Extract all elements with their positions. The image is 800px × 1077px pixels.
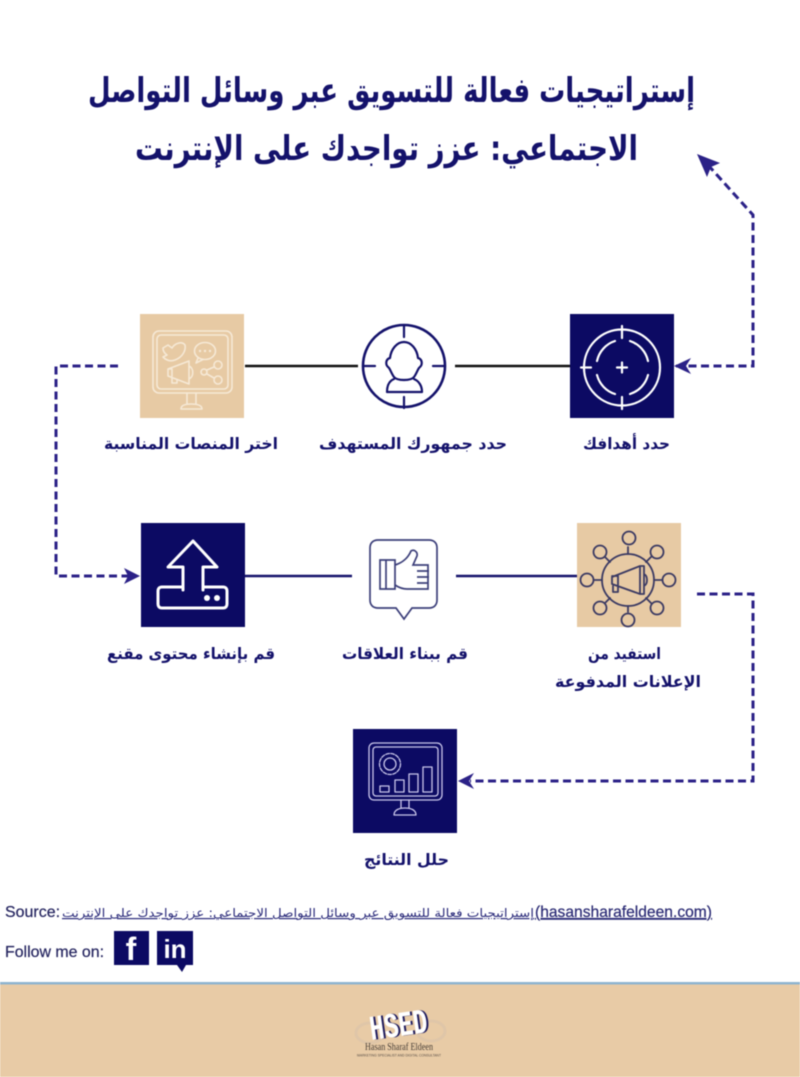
source line: (hasansharafeldeen.com) (535, 904, 712, 921)
step: paid ads (555, 523, 701, 691)
icon: linkedin (157, 931, 193, 972)
label: create content: قم بإنشاء محتوى مقنع (107, 644, 275, 663)
step: create content (107, 523, 275, 663)
logo: HSED (369, 1003, 432, 1051)
label: paid ads (555, 644, 701, 691)
label: set goals: حدد أهدافك (583, 433, 670, 453)
connector: content to relationships (245, 575, 352, 577)
step: choose platforms (104, 314, 278, 453)
icon: analytics monitor (353, 729, 457, 833)
logo (356, 1003, 445, 1058)
source line: Source: (5, 904, 60, 921)
logo: Hasan Sharaf Eldeen (365, 1042, 433, 1053)
logo: HSED (367, 1003, 430, 1051)
icon: upload (141, 523, 245, 627)
icon: facebook: f (126, 931, 137, 967)
connector: relationships to ads (456, 575, 578, 577)
label: build relationships: قم ببناء العلاقات (342, 644, 468, 663)
label: target audience: حدد جمهورك المستهدف (319, 434, 507, 453)
connector: goals to audience (455, 365, 570, 367)
icon: linkedin: in (163, 934, 187, 964)
follow me: Follow me on: (5, 944, 104, 961)
arrow: goals to title (674, 154, 753, 374)
title: الاجتماعي: عزز تواجدك على الإنترنت (135, 129, 638, 169)
step: set goals (570, 314, 674, 453)
title (88, 71, 695, 169)
follow me (5, 931, 193, 972)
icon: megaphone network (577, 523, 681, 627)
icon: target (570, 314, 674, 418)
label: paid ads: الإعلانات المدفوعة (555, 672, 701, 691)
arrow: platforms to content (56, 366, 140, 584)
label: choose platforms: اختر المنصات المناسبة (104, 434, 278, 453)
step: analyze results (353, 729, 457, 869)
step: target audience (319, 325, 507, 453)
label: paid ads: استفيد من (588, 644, 661, 663)
icon: social media monitor (140, 314, 244, 418)
icon: thumbs up speech bubble (370, 540, 437, 619)
source line: إستراتيجيات فعالة للتسويق عبر وسائل التواصل الاجتماعي: عزز تواجدك على الإنترنت (62, 906, 534, 921)
label: analyze results: حلل النتائج (364, 850, 449, 869)
icon: facebook (114, 931, 149, 967)
logo: MARKETING SPECIALIST AND DIGITAL CONSULTANT (357, 1052, 441, 1058)
arrow: ads to analysis (458, 594, 753, 789)
source line (5, 904, 712, 921)
step: build relationships (342, 540, 468, 663)
footer band (0, 982, 800, 1077)
connector: audience to platforms (245, 365, 358, 367)
icon: audience target (363, 325, 445, 408)
